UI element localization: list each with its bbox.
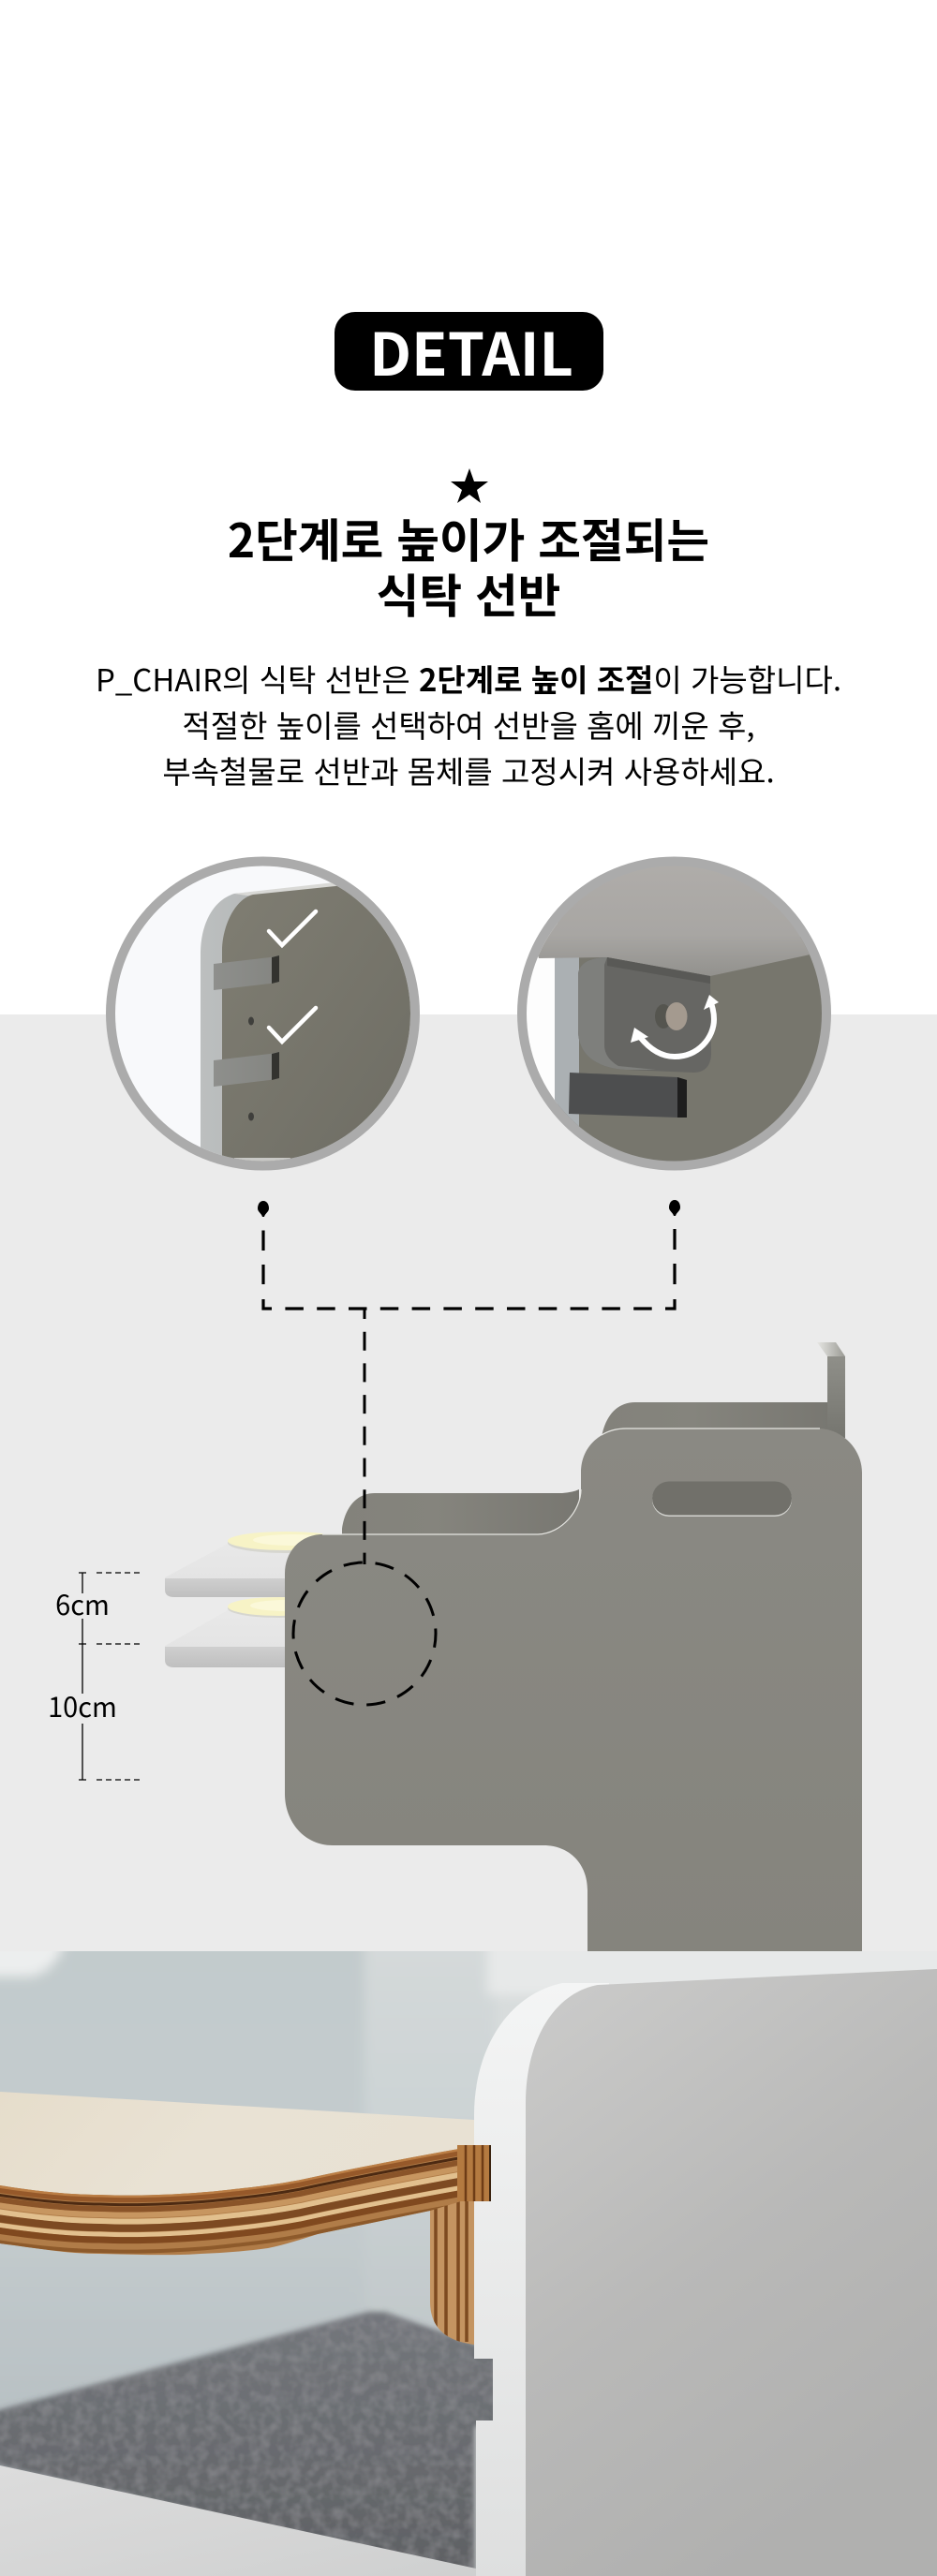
pin right bbox=[669, 1200, 680, 1216]
back panel behind seat bbox=[342, 1489, 579, 1536]
badge label: DETAIL bbox=[369, 308, 573, 393]
back panel upper bbox=[602, 1402, 829, 1437]
dashed left leg bbox=[263, 1231, 272, 1309]
main body side bbox=[285, 1429, 862, 1951]
pin left bbox=[258, 1201, 269, 1217]
bracket plate bbox=[578, 957, 711, 1073]
carpet bbox=[0, 2312, 497, 2576]
connector: dashed stem to chair bbox=[364, 1309, 365, 1564]
photo: plywood shelf on white chair bbox=[0, 1930, 937, 2576]
dimension label 6cm: 6cm bbox=[55, 1584, 110, 1623]
chair gray side face bbox=[526, 1969, 937, 2576]
dashed focus circle bbox=[275, 1545, 454, 1723]
upper shelf bbox=[165, 1536, 300, 1597]
body text: 적절한 높이를 선택하여 선반을 홈에 끼운 후, bbox=[182, 702, 755, 747]
circle: shelf slots close-up bbox=[106, 856, 422, 1171]
lower cup ring bbox=[228, 1597, 331, 1618]
detail badge bbox=[335, 312, 603, 391]
circle: bracket close-up bbox=[515, 856, 837, 1171]
icon: star bbox=[451, 468, 488, 503]
title: 2단계로 높이가 조절되는 bbox=[228, 504, 709, 571]
chair illustration bbox=[165, 1342, 862, 1951]
photo: slots bbox=[112, 862, 422, 1166]
dimension lines bbox=[79, 1573, 140, 1780]
title: 식탁 선반 bbox=[377, 559, 560, 627]
upper cup ring bbox=[228, 1532, 344, 1553]
dimension label 10cm: 10cm bbox=[48, 1686, 117, 1725]
screws bbox=[248, 1017, 254, 1120]
tab bbox=[457, 2145, 491, 2201]
body text: P_CHAIR의 식탁 선반은 2단계로 높이 조절이 가능합니다. bbox=[96, 656, 841, 701]
leg bbox=[430, 2201, 474, 2345]
body top highlight bbox=[322, 1429, 820, 1534]
slot bbox=[569, 1073, 687, 1118]
photo: bracket bbox=[527, 924, 822, 1162]
icon: check marks bbox=[269, 911, 316, 1042]
dashed right leg bbox=[665, 1229, 675, 1309]
tabletop surface bbox=[0, 2092, 474, 2196]
dashed horizontal bbox=[285, 1307, 665, 1310]
plywood front edge bbox=[0, 2149, 461, 2256]
bolt bbox=[655, 1002, 688, 1030]
chair white edge band bbox=[474, 1983, 609, 2576]
shelves bbox=[165, 1532, 344, 1667]
blurred wall bbox=[0, 1930, 937, 2492]
floor bbox=[0, 2465, 476, 2576]
backboard upright bbox=[817, 1342, 845, 1438]
slot lower bbox=[214, 1052, 279, 1087]
gray background band bbox=[0, 1014, 937, 1951]
body text bbox=[96, 656, 841, 792]
lower shelf bbox=[165, 1604, 300, 1667]
icon: rotate arrow bbox=[631, 995, 719, 1057]
handle hole bbox=[652, 1482, 792, 1517]
connector: dashed lines from circles bbox=[258, 1200, 680, 1309]
title bbox=[228, 504, 709, 627]
slot upper bbox=[214, 955, 279, 990]
body text: 부속철물로 선반과 몸체를 고정시켜 사용하세요. bbox=[162, 748, 775, 792]
